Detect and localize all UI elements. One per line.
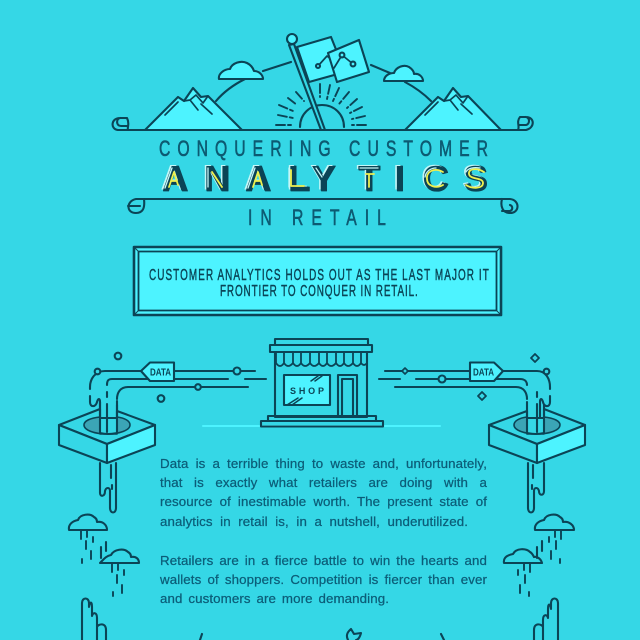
right drip xyxy=(528,463,544,512)
right tag xyxy=(470,362,503,381)
bottom left drips xyxy=(82,598,106,640)
bottom right drips xyxy=(534,598,558,640)
shop base xyxy=(261,416,383,426)
bottom bracket right xyxy=(441,634,444,640)
bottom bracket left xyxy=(200,634,202,640)
paragraph 2 xyxy=(160,553,487,606)
shop window: SHOP xyxy=(290,386,324,396)
callout box xyxy=(134,247,501,315)
left tag xyxy=(141,362,174,381)
right data pipeline xyxy=(379,354,585,512)
right basin xyxy=(489,392,585,463)
title word: analytics: ANALYTICS xyxy=(162,160,487,198)
rain cloud lower right xyxy=(504,541,542,596)
right pipe lines xyxy=(379,371,550,420)
shop roof xyxy=(270,339,372,352)
flag front xyxy=(328,40,369,82)
body copy: Retailers are in a fierce battle to win the hearts and xyxy=(160,553,487,568)
mountain left xyxy=(145,88,242,130)
body copy: wallets of shoppers. Competition is fiercer than ever xyxy=(160,572,487,587)
cloud right xyxy=(384,66,423,81)
cloud left xyxy=(219,62,263,79)
rain cloud lower left xyxy=(100,542,139,596)
callout text: CUSTOMER ANALYTICS HOLDS OUT AS THE LAST MAJOR IT xyxy=(149,266,489,284)
body copy: that is exactly what retailers are doing with a xyxy=(160,475,487,490)
left tag: DATA xyxy=(150,368,171,378)
left basin xyxy=(59,392,155,463)
paragraph 1 xyxy=(160,456,488,529)
body copy: and customers are more demanding. xyxy=(160,591,389,606)
shop door xyxy=(338,375,357,417)
left nodes xyxy=(95,353,240,402)
callout text: FRONTIER TO CONQUER IN RETAIL. xyxy=(220,282,418,300)
rain cloud top left xyxy=(69,515,107,563)
body copy: analytics in retail is, in a nutshell, underutilized. xyxy=(160,514,468,529)
ribbon top xyxy=(113,117,533,130)
callout text xyxy=(149,266,489,300)
right tag: DATA xyxy=(473,368,494,378)
body copy: Data is a terrible thing to waste and, unfortunately, xyxy=(160,456,487,471)
right nodes xyxy=(402,354,549,400)
left drip xyxy=(100,463,116,512)
mountain right xyxy=(405,88,501,130)
left pipe lines xyxy=(90,371,266,420)
title word: analytics: ANALYTICS xyxy=(162,158,488,199)
sun with rays xyxy=(276,84,366,127)
title line: conquering customer: CONQUERING CUSTOMER xyxy=(159,136,488,162)
shop awning xyxy=(276,352,367,366)
shop xyxy=(261,339,383,426)
left data pipeline xyxy=(59,353,266,512)
flag pole xyxy=(287,34,325,130)
shop walls xyxy=(275,352,367,417)
title line: in retail: IN RETAIL xyxy=(248,205,386,231)
title word: analytics: ANALYTICS xyxy=(160,158,485,198)
bottom leaf icon xyxy=(347,629,361,640)
rain cloud top right xyxy=(535,515,574,563)
shop underline xyxy=(203,425,440,427)
body copy: resource of inestimable worth. The present state of xyxy=(160,494,487,509)
hill arcs xyxy=(216,62,431,101)
ribbon bottom xyxy=(128,199,518,213)
header illustration xyxy=(113,34,533,213)
flag back xyxy=(297,37,345,82)
